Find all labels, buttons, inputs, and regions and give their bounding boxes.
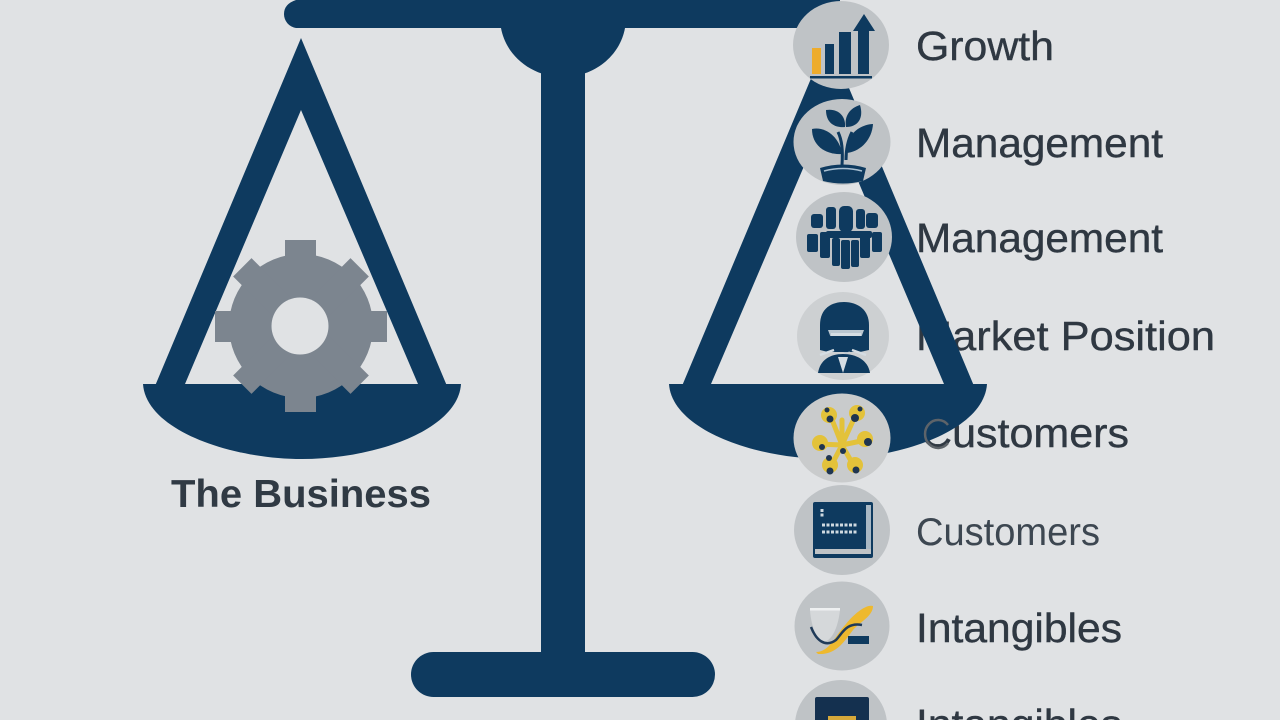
scale stand: beam, hub, column and base	[284, 0, 840, 697]
base	[411, 652, 715, 697]
icon: person portrait	[797, 292, 889, 380]
icon: book	[794, 485, 890, 575]
beam	[284, 0, 840, 28]
faint letter outline over the bowl	[925, 420, 948, 448]
icon: cup and ribbon	[794, 582, 890, 670]
icon: potted plant	[794, 99, 890, 185]
icon: group of people	[796, 192, 892, 282]
hub	[501, 28, 625, 77]
column	[541, 60, 585, 660]
label: Intangibles 1: Intangibles	[916, 605, 1122, 651]
right pan bowl	[669, 384, 987, 459]
label: Growth: Growth	[916, 23, 1054, 69]
icon: customer network	[794, 394, 890, 482]
right pan frame	[682, 38, 974, 386]
icon: gear	[215, 240, 387, 412]
label: Customers 2: Customers	[916, 511, 1100, 554]
left scale pan	[143, 38, 461, 459]
label: Management 1: Management	[916, 120, 1164, 166]
label: Management 2: Management	[916, 215, 1164, 261]
list of right-side labels	[916, 23, 1215, 720]
icon: growth chart	[793, 1, 889, 89]
icon: dark book	[795, 680, 887, 720]
left pan frame	[155, 38, 447, 386]
label: Customers 1: Customers	[921, 410, 1129, 456]
left pan bowl	[143, 384, 461, 459]
right scale pan	[669, 38, 987, 459]
heading: The Business: The Business	[171, 473, 431, 516]
label: Market Position: Market Position	[916, 313, 1215, 359]
